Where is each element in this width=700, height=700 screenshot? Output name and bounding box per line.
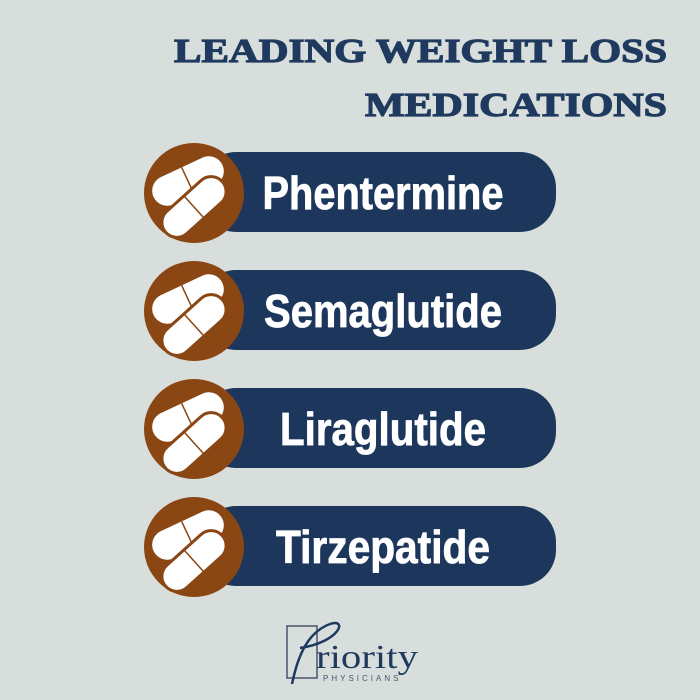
logo [287, 623, 418, 684]
item: Tirzepatide: Tirzepatide [276, 521, 490, 573]
item: Phentermine [144, 143, 556, 244]
icon: pills [147, 387, 232, 480]
item: Tirzepatide [144, 497, 556, 598]
icon: pills [147, 505, 232, 598]
icon: pills [147, 269, 232, 362]
title [174, 33, 667, 124]
item: Phentermine: Phentermine [262, 167, 504, 219]
logo: riority [316, 639, 418, 676]
title: LEADING WEIGHT LOSS [174, 33, 667, 70]
item: Semaglutide: Semaglutide [264, 285, 502, 337]
title: MEDICATIONS [365, 87, 667, 124]
item: Liraglutide [144, 379, 556, 480]
item: Semaglutide [144, 261, 556, 362]
icon: pills [147, 151, 232, 244]
item: Liraglutide: Liraglutide [280, 403, 486, 455]
logo: PHYSICIANS [323, 674, 401, 683]
